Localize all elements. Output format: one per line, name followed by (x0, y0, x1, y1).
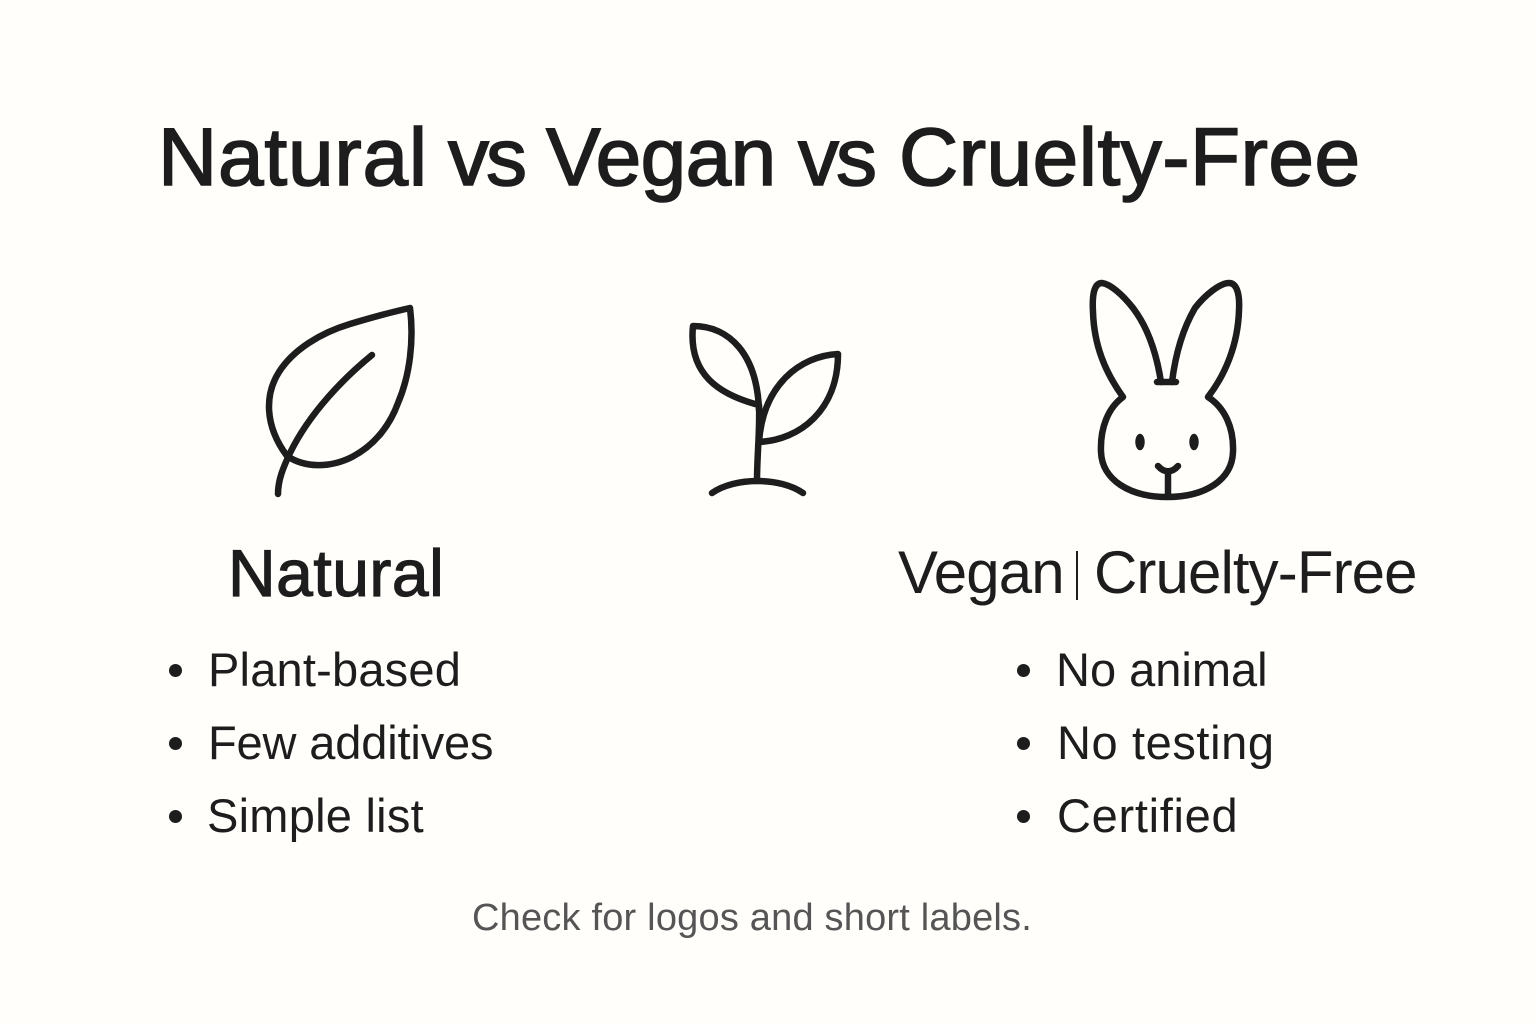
title: vs (798, 112, 874, 203)
list: natural (169, 643, 493, 842)
title: Vegan (546, 112, 776, 203)
bullet item: plant-based: Plant-based (208, 643, 461, 696)
label: vegan: Vegan (898, 539, 1064, 606)
bullet item: simple list: Simple list (207, 789, 424, 842)
list: vegan and cruelty-free (1017, 643, 1275, 842)
bullet item: few additives: Few additives (208, 716, 493, 769)
heading: natural: Natural (228, 536, 444, 610)
heading: vegan and cruelty-free (898, 539, 1417, 606)
bullet item: no testing: No testing (1057, 716, 1275, 769)
title (158, 112, 1361, 203)
icon: rabbit (1090, 280, 1242, 500)
divider bar (1076, 551, 1078, 600)
icon: leaf (266, 304, 415, 498)
title: Natural (158, 112, 428, 203)
label: cruelty-free: Cruelty-Free (1094, 539, 1417, 606)
footer note: Check for logos and short labels. (472, 897, 1032, 939)
title: Cruelty-Free (899, 112, 1361, 203)
title: vs (448, 112, 524, 203)
bullet item: certified: Certified (1057, 789, 1238, 842)
icon: sprout (689, 322, 842, 496)
bullet item: no animal: No animal (1056, 643, 1268, 696)
